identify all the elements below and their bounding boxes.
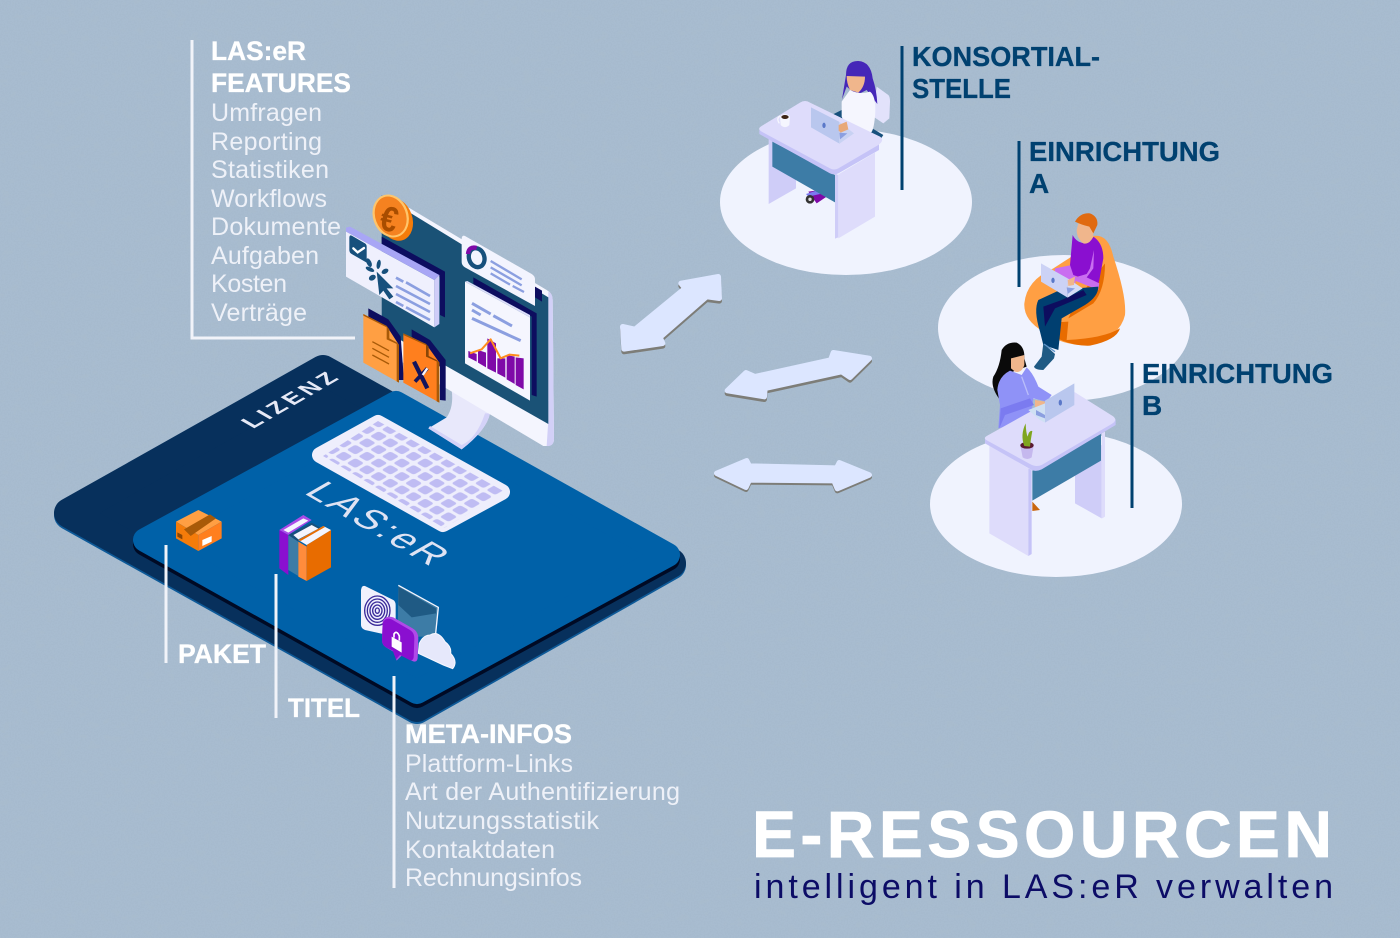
meta-infos leader and text block: Kontaktdaten — [405, 836, 555, 864]
text block: LAS:eR features: Kosten — [211, 270, 287, 298]
Einrichtung B leader and label: EINRICHTUNG — [1142, 358, 1333, 389]
envelope — [398, 585, 438, 637]
monitor body — [382, 197, 554, 446]
laptop — [1028, 383, 1074, 423]
license pad — [69, 370, 671, 709]
platform: Konsortialstelle — [720, 129, 972, 275]
platform: Einrichtung B — [930, 431, 1182, 577]
blue pad — [145, 403, 668, 692]
laptop — [1041, 263, 1083, 298]
meta-infos leader and text block — [394, 676, 680, 892]
Konsortialstelle leader and label — [902, 41, 1100, 190]
icon: package — [176, 510, 222, 551]
laptop — [811, 107, 854, 144]
platform: Einrichtung A — [938, 255, 1190, 401]
text block: LAS:eR features: Reporting — [211, 128, 322, 156]
desk legs — [769, 137, 875, 239]
pad label: LAS:eR: LAS:eR — [295, 476, 459, 571]
Einrichtung A leader and label — [1019, 136, 1220, 287]
Einrichtung A leader and label: A — [1029, 168, 1049, 199]
text block: LAS:eR features: Dokumente — [211, 213, 341, 241]
panel: donut chart card — [462, 236, 542, 306]
fingerprint card — [361, 586, 396, 637]
desk top — [985, 392, 1116, 471]
plant — [1020, 423, 1034, 459]
text block: LAS:eR features: Statistiken — [211, 156, 329, 184]
text block: LAS:eR features: FEATURES — [211, 68, 351, 98]
paket leader and label — [166, 545, 266, 669]
panel: report card with chart — [465, 277, 537, 401]
arrow: monitor to Einrichtung B — [717, 461, 869, 491]
icon: books — [279, 515, 331, 581]
meta-infos leader and text block: Plattform-Links — [405, 750, 573, 778]
text block: LAS:eR features: LAS:eR — [211, 36, 306, 66]
desk legs — [989, 432, 1105, 556]
illustration: woman at desk with plant — [985, 343, 1116, 556]
pad label: LIZENZ: LIZENZ — [235, 368, 344, 432]
title: E-RESSOURCEN — [752, 797, 1332, 871]
illustration: man in bean bag — [1024, 213, 1125, 370]
icon: euro coin: € — [376, 199, 402, 241]
paket leader and label: PAKET — [178, 639, 266, 669]
Einrichtung A leader and label: EINRICHTUNG — [1029, 136, 1220, 167]
icon: monitor — [346, 189, 554, 449]
keyboard — [320, 421, 505, 528]
man — [1034, 213, 1103, 370]
meta-infos leader and text block: Nutzungsstatistik — [405, 807, 600, 835]
features bracket — [192, 40, 355, 338]
panel: checklist window — [346, 227, 445, 327]
icon: orange document — [363, 308, 404, 383]
text block: LAS:eR features: Umfragen — [211, 99, 322, 127]
coffee cup — [778, 114, 790, 127]
cloud — [418, 633, 455, 669]
chair — [832, 87, 890, 140]
desk top — [759, 101, 882, 174]
titel leader and label: TITEL — [288, 693, 360, 723]
text block: LAS:eR features: Aufgaben — [211, 242, 319, 270]
bean bag — [1024, 236, 1125, 346]
text block: LAS:eR features: Workflows — [211, 185, 327, 213]
arrow: monitor to Konsortialstelle — [623, 277, 719, 352]
icon: meta-info group — [361, 585, 455, 669]
text block: LAS:eR features — [211, 36, 351, 327]
arrow: monitor to Einrichtung A — [727, 353, 869, 399]
Einrichtung B leader and label: B — [1142, 390, 1162, 421]
icon: excel document — [403, 329, 446, 403]
Einrichtung B leader and label — [1132, 358, 1333, 508]
meta-infos leader and text block: META-INFOS — [405, 719, 572, 749]
text block: LAS:eR features: Verträge — [211, 299, 307, 327]
lock bubble — [382, 617, 418, 662]
meta-infos leader and text block: Rechnungsinfos — [405, 864, 582, 892]
woman — [992, 343, 1052, 428]
woman — [806, 61, 877, 204]
screen — [382, 195, 548, 424]
Konsortialstelle leader and label: STELLE — [912, 73, 1011, 104]
Konsortialstelle leader and label: KONSORTIAL- — [912, 41, 1100, 72]
illustration: woman at desk — [759, 61, 890, 239]
icon: euro coin — [367, 189, 419, 246]
bar chart — [468, 338, 524, 389]
meta-infos leader and text block: Art der Authentifizierung — [405, 778, 680, 806]
subtitle: intelligent in LAS:eR verwalten — [754, 868, 1333, 906]
monitor stand — [428, 390, 490, 449]
